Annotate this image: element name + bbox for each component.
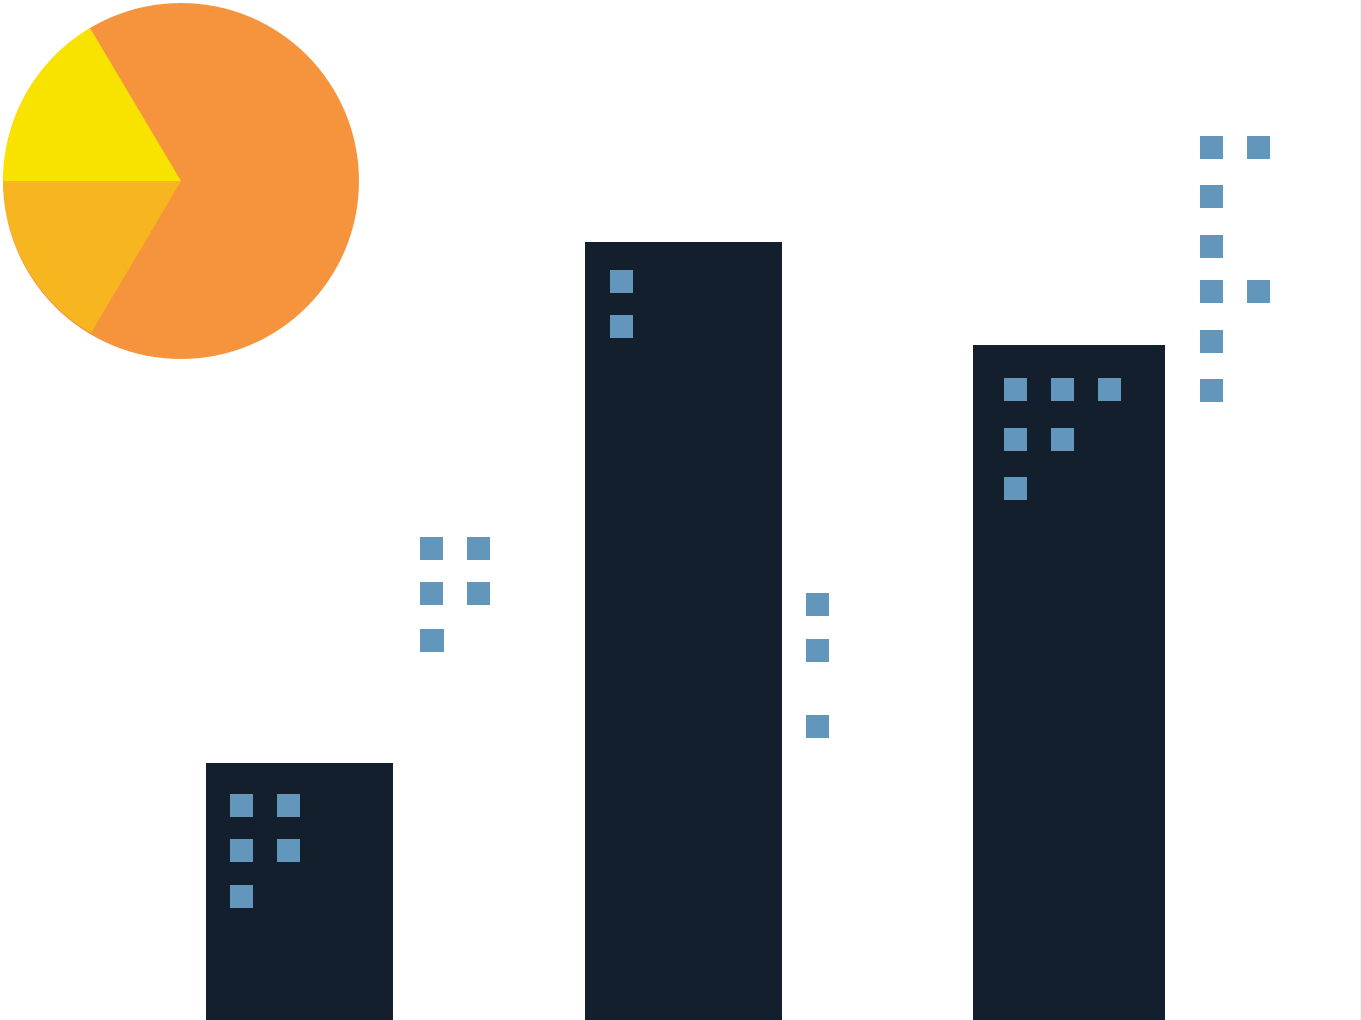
pie slice: amber (3, 181, 181, 333)
building: centre (585, 242, 782, 1020)
pie chart: sun (3, 3, 359, 359)
pie slice: yellow (3, 28, 181, 181)
pie slice: orange (3, 3, 359, 359)
building: right (973, 345, 1165, 1020)
floating squares: centre group (806, 593, 829, 738)
floating squares: right group (1200, 136, 1270, 402)
floating squares: left group (420, 537, 490, 652)
building: left (206, 763, 393, 1020)
